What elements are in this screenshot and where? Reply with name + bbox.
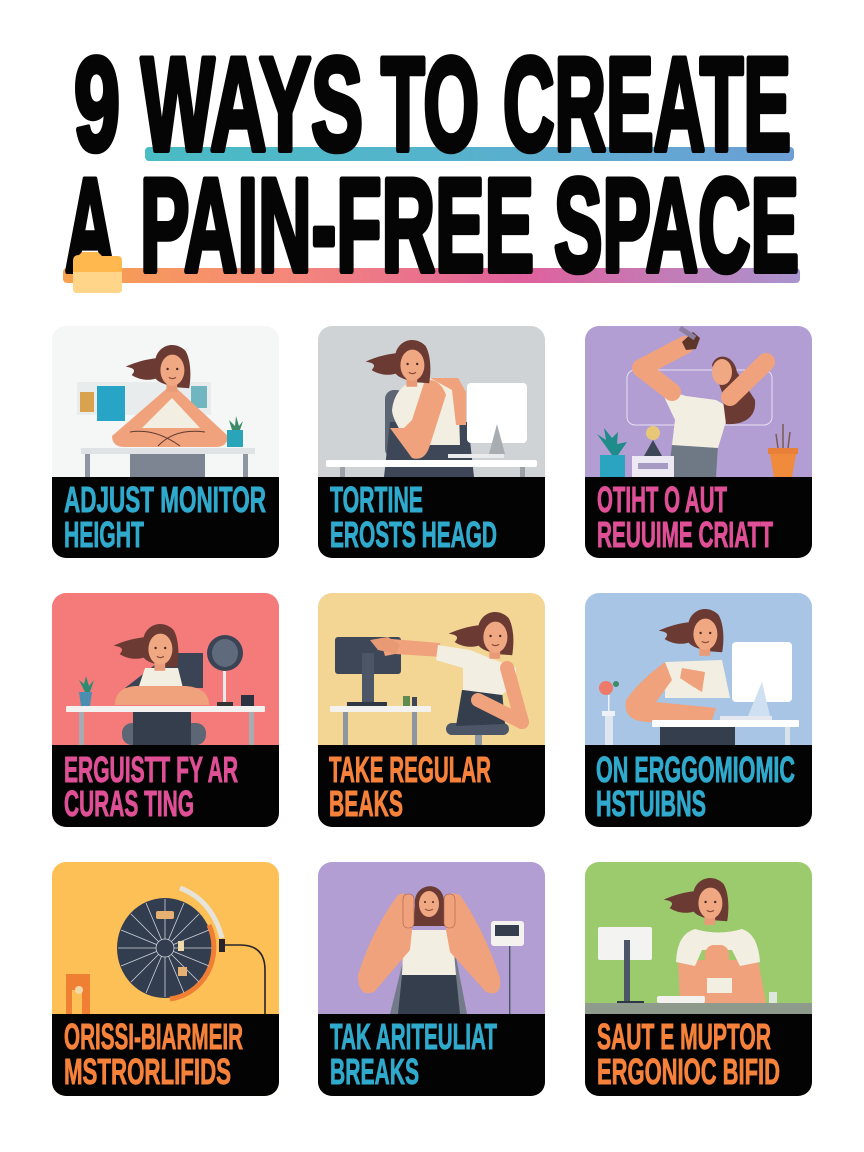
panel: saut e muptor — [585, 862, 812, 1096]
panel: tak ariteuliat breaks — [318, 862, 545, 1096]
panel: erguistt fy ar — [52, 593, 279, 827]
label text — [596, 749, 795, 824]
title line two: PAIN-FREE — [140, 152, 534, 300]
label text — [597, 1016, 780, 1092]
illustration: woman touching neck beside monitor — [326, 340, 537, 477]
card background — [585, 326, 812, 558]
label band — [52, 745, 279, 827]
label band — [52, 1014, 279, 1096]
label text: ERGUISTT FY AR — [64, 749, 238, 790]
label text: OTIHT O AUT — [597, 479, 727, 520]
label text — [329, 749, 491, 824]
label text — [64, 749, 238, 824]
card background — [585, 593, 812, 827]
title line one: WAYS — [141, 31, 363, 179]
card background — [585, 862, 812, 1096]
illustration: dark wheel with cable — [66, 888, 265, 1014]
label band — [585, 745, 812, 827]
card background — [318, 326, 545, 558]
panel: orissi-biarmeir — [52, 862, 279, 1096]
icon: folder — [73, 252, 122, 293]
card background — [318, 593, 545, 827]
label text — [330, 1016, 497, 1092]
label text — [64, 479, 266, 555]
underline: line one — [145, 147, 794, 161]
label text: ORISSI-BIARMEIR — [64, 1016, 243, 1057]
label text — [330, 479, 497, 555]
label text: HSTUIBNS — [596, 783, 706, 824]
illustration: woman at desk with hands clasped — [77, 345, 255, 477]
illustration: woman reaching toward monitor — [330, 612, 522, 745]
label band — [318, 1014, 545, 1096]
label text: TAK ARITEULIAT — [330, 1016, 497, 1057]
illustration: woman stretching arms overhead — [597, 328, 798, 477]
panel: adjust monitor height — [52, 326, 279, 558]
label band — [318, 477, 545, 558]
illustration: woman typing at white monitor — [599, 609, 799, 745]
title — [63, 31, 800, 300]
title line one — [74, 31, 791, 179]
label text: ADJUST MONITOR — [64, 479, 266, 520]
card background — [52, 862, 279, 1096]
label text: TAKE REGULAR — [329, 749, 491, 790]
label band — [318, 745, 545, 827]
title line one: 9 — [74, 31, 120, 179]
illustration: woman at desk with clasped hands — [585, 878, 812, 1014]
card background — [318, 862, 545, 1096]
title line one: TO — [381, 31, 479, 179]
panel: tortine erosts heagd — [318, 326, 545, 558]
label text: BREAKS — [330, 1051, 419, 1092]
label text: EROSTS HEAGD — [330, 514, 497, 555]
label band — [585, 1014, 812, 1096]
panel: on erggomiomic — [585, 593, 812, 827]
panel: take regular beaks — [318, 593, 545, 827]
label text: HEIGHT — [64, 514, 144, 555]
label text: MSTRORLIFIDS — [64, 1051, 231, 1092]
label text — [597, 479, 773, 555]
underline: line two — [63, 268, 800, 283]
label text: TORTINE — [330, 479, 423, 520]
label text: BEAKS — [329, 783, 403, 824]
illustration: woman holding head with both hands — [358, 886, 524, 1014]
illustration: woman seated at desk with round mirror — [66, 624, 265, 745]
label text — [64, 1016, 243, 1092]
panel: otiht o aut — [585, 326, 812, 558]
label text: CURAS TING — [64, 783, 194, 824]
card background — [52, 593, 279, 827]
title line two: A — [65, 152, 115, 300]
label band — [585, 477, 812, 558]
card background — [52, 326, 279, 558]
label band — [52, 477, 279, 558]
